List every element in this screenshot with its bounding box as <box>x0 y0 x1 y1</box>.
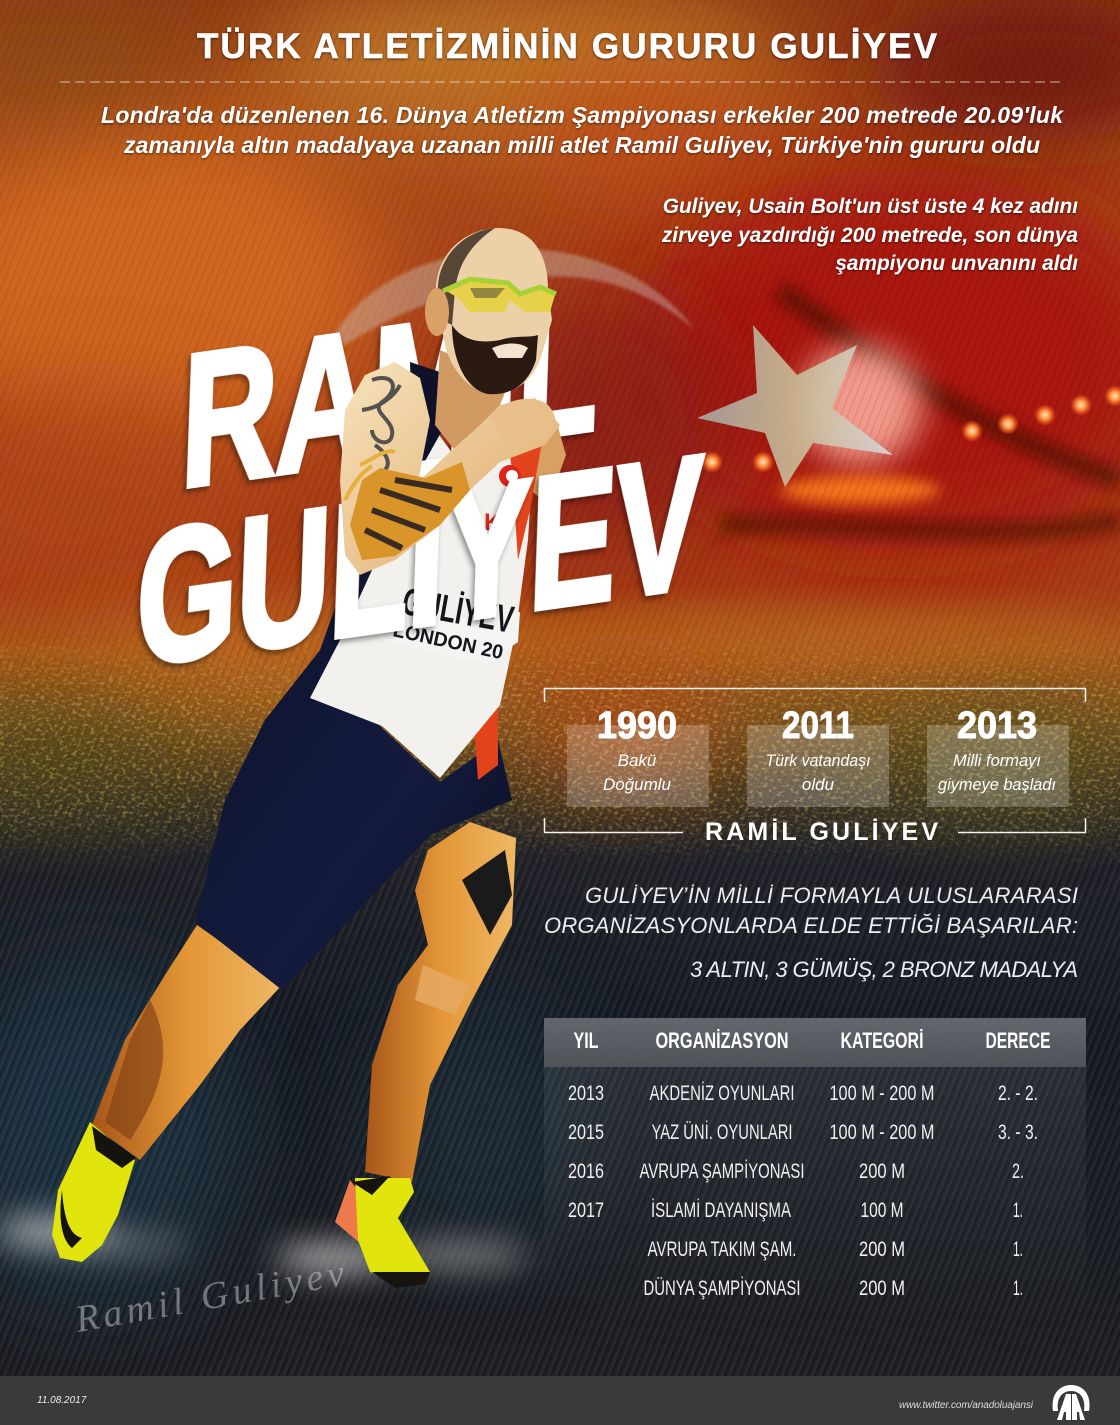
date: 11.08.2017 <box>37 1395 87 1406</box>
table rows: AVRUPA TAKIM ŞAM. <box>648 1238 796 1261</box>
red hip panel <box>474 705 498 780</box>
hair <box>438 228 495 325</box>
right arm behind <box>520 400 566 505</box>
scorpion tattoo <box>350 462 470 560</box>
table header: KATEGORİ <box>840 1028 924 1053</box>
intro text: Londra'da düzenlenen 16. Dünya Atletizm Şampiyonası erkekler 200 metrede 20.09'luk <box>101 102 1064 128</box>
secondary text: zirveye yazdırdığı 200 metrede, son dünya <box>661 224 1078 247</box>
table: results <box>544 1018 1086 1317</box>
table rows: 100 M <box>860 1199 904 1222</box>
table rows: 2015 <box>568 1121 604 1144</box>
panel: biography <box>544 688 1086 846</box>
footer <box>0 1376 1120 1425</box>
shoe: right <box>335 1176 430 1288</box>
icon: anadolu agency logo <box>1053 1385 1090 1420</box>
table rows: 2. <box>1012 1160 1024 1183</box>
table header: ORGANİZASYON <box>656 1028 788 1053</box>
achievements heading <box>544 883 1078 982</box>
table rows: 200 M <box>859 1238 905 1261</box>
dragon tattoo <box>362 378 400 470</box>
title: TÜRK ATLETİZMİNİN GURURU GULİYEV <box>197 27 938 66</box>
table rows: 2013 <box>568 1082 604 1105</box>
name: GULİYEV: GULİYEV <box>134 414 705 705</box>
biography heading: RAMİL GULİYEV <box>705 818 938 846</box>
box 1990: Bakü <box>618 751 657 770</box>
beard <box>452 325 538 394</box>
signature: Ramil Guliyev <box>71 1252 348 1341</box>
table rows: AKDENİZ OYUNLARI <box>650 1082 794 1105</box>
table rows: 3. - 3. <box>998 1121 1038 1144</box>
table rows: DÜNYA ŞAMPİYONASI <box>644 1277 800 1300</box>
box 1990 <box>567 705 709 807</box>
box 2011: oldu <box>802 775 835 794</box>
box 1990: 1990 <box>597 705 677 747</box>
box 2011: Türk vatandaşı <box>766 751 870 770</box>
bracket top <box>544 688 1086 702</box>
table rows: 1. <box>1013 1238 1023 1261</box>
table rows: 2016 <box>568 1160 604 1183</box>
achievements heading: ORGANİZASYONLARDA ELDE ETTİĞİ BAŞARILAR: <box>544 913 1078 938</box>
vest dark strap <box>410 362 448 470</box>
table header: YIL <box>574 1028 598 1053</box>
box 1990: Doğumlu <box>603 775 672 794</box>
turkish flag badge <box>499 465 521 487</box>
table rows <box>568 1082 1038 1300</box>
icon: flag star <box>697 325 893 487</box>
head <box>436 228 552 393</box>
achievements heading: 3 ALTIN, 3 GÜMÜŞ, 2 BRONZ MADALYA <box>690 957 1078 982</box>
table rows: 2017 <box>568 1199 604 1222</box>
fist <box>490 399 555 455</box>
sunglasses <box>443 279 556 312</box>
bib <box>378 581 520 664</box>
table rows: 200 M <box>859 1277 905 1300</box>
bracket bottom <box>544 818 1086 832</box>
bib: GULİYEV <box>399 581 517 642</box>
table body background <box>544 1067 1086 1317</box>
ear <box>425 288 449 336</box>
table rows: 100 M - 200 M <box>830 1082 934 1105</box>
secondary text: şampiyonu unvanını aldı <box>835 252 1078 275</box>
table rows: YAZ ÜNİ. OYUNLARI <box>652 1121 792 1144</box>
source url: www.twitter.com/anadoluajansi <box>899 1400 1034 1411</box>
intro text <box>101 102 1064 158</box>
title divider <box>60 81 1060 83</box>
table rows: AVRUPA ŞAMPİYONASI <box>640 1160 804 1183</box>
name: RAMİL: RAMİL <box>179 257 602 527</box>
icon: flag crescent <box>335 249 695 345</box>
table rows: 100 M - 200 M <box>830 1121 934 1144</box>
secondary text <box>661 195 1078 275</box>
table rows: 2. - 2. <box>998 1082 1038 1105</box>
intro text: zamanıyla altın madalyaya uzanan milli atlet Ramil Guliyev, Türkiye'nin gururu oldu <box>123 132 1040 158</box>
sponsor logo: K <box>484 509 502 536</box>
table rows: 200 M <box>859 1160 905 1183</box>
back leg shading <box>105 1000 163 1140</box>
knee tape <box>462 850 512 935</box>
table rows: 1. <box>1013 1199 1023 1222</box>
achievements heading: GULİYEV’İN MİLLİ FORMAYLA ULUSLARARASI <box>585 883 1078 908</box>
vest <box>310 425 535 778</box>
box 2013: giymeye başladı <box>938 775 1056 794</box>
box 2011 <box>747 705 889 807</box>
neck <box>435 350 510 470</box>
mouth <box>492 344 528 358</box>
bib: LONDON 20 <box>391 619 505 664</box>
front leg <box>365 822 516 1182</box>
shoe: left <box>52 1122 136 1262</box>
box 2013 <box>927 705 1069 807</box>
athlete: tattooed arm <box>340 362 560 575</box>
back leg <box>92 925 282 1160</box>
secondary text: Guliyev, Usain Bolt'un üst üste 4 kez adını <box>663 195 1078 218</box>
box 2013: Milli formayı <box>953 751 1041 770</box>
vest red side <box>505 420 545 560</box>
table rows: 1. <box>1013 1277 1023 1300</box>
athlete: body <box>92 228 566 1182</box>
box 2013: 2013 <box>957 705 1037 747</box>
leg tape <box>415 965 470 1015</box>
table rows: İSLAMİ DAYANIŞMA <box>651 1199 791 1222</box>
table header: DERECE <box>986 1028 1050 1053</box>
box 2011: 2011 <box>782 705 854 747</box>
shorts <box>195 560 512 990</box>
table header <box>544 1018 1086 1067</box>
